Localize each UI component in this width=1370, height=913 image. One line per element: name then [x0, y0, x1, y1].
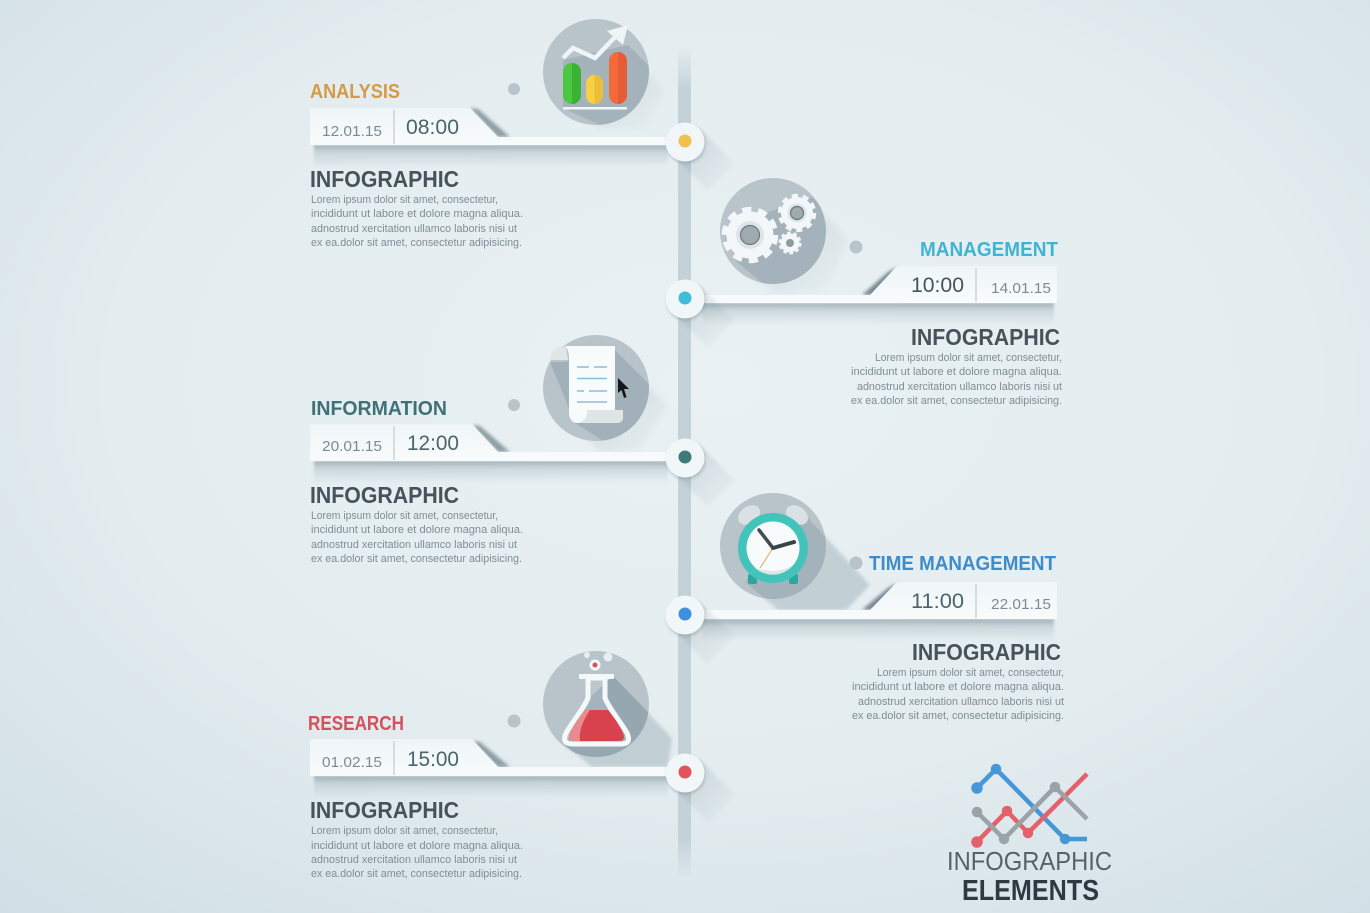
- step 3: information: [310, 335, 735, 565]
- timeline node: [666, 280, 735, 348]
- connector dot: [508, 83, 520, 95]
- description text: [310, 482, 523, 565]
- icon: line chart: [974, 766, 1087, 846]
- logo: infographic elements: [947, 766, 1112, 907]
- heading: information: INFORMATION: [311, 398, 447, 420]
- description text: [310, 166, 523, 249]
- timeline node: [666, 122, 735, 191]
- connector dot: [508, 714, 520, 728]
- date and time bar: 08:00: [406, 116, 459, 139]
- description text: INFOGRAPHIC: [911, 324, 1060, 350]
- description text: adnostrud xercitation ullamco laboris nisi ut: [311, 854, 517, 866]
- timeline node: [666, 596, 735, 664]
- logo subtitle: ELEMENTS: [962, 875, 1099, 907]
- step 5: research: [308, 651, 735, 880]
- description text: adnostrud xercitation ullamco laboris nisi ut: [857, 381, 1062, 393]
- description text: incididunt ut labore et dolore magna aliqua.: [311, 208, 523, 220]
- date and time bar: 01.02.15: [322, 754, 382, 771]
- timeline node: [666, 754, 735, 822]
- date and time bar: 12:00: [407, 432, 459, 455]
- description text: incididunt ut labore et dolore magna aliqua.: [851, 366, 1062, 378]
- heading: analysis: ANALYSIS: [310, 81, 400, 103]
- description text: ex ea.dolor sit amet, consectetur adipisicing.: [311, 237, 522, 249]
- step 4: time management: [666, 493, 1064, 722]
- description text: Lorem ipsum dolor sit amet, consectetur,: [311, 825, 498, 837]
- description text: [851, 324, 1062, 407]
- description text: [310, 797, 523, 880]
- icon: gears: [720, 178, 842, 291]
- date and time bar: 15:00: [407, 748, 459, 771]
- description text: incididunt ut labore et dolore magna aliqua.: [311, 840, 523, 852]
- timeline spine: [678, 48, 691, 880]
- description text: ex ea.dolor sit amet, consectetur adipisicing.: [311, 868, 522, 880]
- timeline node: [666, 438, 735, 507]
- connector dot: [850, 556, 862, 570]
- date and time bar: 11:00: [911, 590, 964, 613]
- step 2: management: [666, 178, 1062, 407]
- date and time bar: 14.01.15: [991, 280, 1051, 297]
- description text: Lorem ipsum dolor sit amet, consectetur,: [875, 352, 1062, 364]
- date and time bar: 12.01.15: [322, 123, 382, 140]
- description text: [852, 639, 1064, 722]
- description text: INFOGRAPHIC: [310, 797, 459, 823]
- description text: ex ea.dolor sit amet, consectetur adipisicing.: [311, 553, 522, 565]
- heading: research: RESEARCH: [308, 713, 404, 735]
- description text: ex ea.dolor sit amet, consectetur adipisicing.: [852, 710, 1064, 722]
- date and time bar: [310, 424, 670, 483]
- description text: adnostrud xercitation ullamco laboris nisi ut: [858, 696, 1064, 708]
- date and time bar: 20.01.15: [322, 438, 382, 455]
- icon: document scroll with cursor: [543, 335, 670, 455]
- description text: Lorem ipsum dolor sit amet, consectetur,: [311, 194, 498, 206]
- icon: alarm clock: [720, 493, 870, 610]
- icon: bar chart with arrow: [543, 19, 656, 125]
- description text: incididunt ut labore et dolore magna aliqua.: [311, 524, 523, 536]
- connector dot: [850, 240, 862, 254]
- description text: incididunt ut labore et dolore magna aliqua.: [852, 681, 1064, 693]
- description text: Lorem ipsum dolor sit amet, consectetur,: [311, 510, 498, 522]
- description text: Lorem ipsum dolor sit amet, consectetur,: [877, 667, 1064, 679]
- description text: adnostrud xercitation ullamco laboris nisi ut: [311, 539, 517, 551]
- date and time bar: 22.01.15: [991, 596, 1051, 613]
- description text: INFOGRAPHIC: [310, 482, 459, 508]
- logo title: INFOGRAPHIC: [947, 846, 1112, 876]
- date and time bar: [310, 108, 670, 167]
- description text: adnostrud xercitation ullamco laboris nisi ut: [311, 223, 517, 235]
- step 1: analysis: [310, 19, 735, 249]
- date and time bar: [700, 266, 1057, 325]
- date and time bar: [700, 582, 1057, 641]
- date and time bar: [310, 739, 670, 798]
- icon: flask: [543, 651, 673, 767]
- heading: management: MANAGEMENT: [920, 239, 1058, 261]
- description text: INFOGRAPHIC: [912, 639, 1061, 665]
- date and time bar: 10:00: [911, 274, 964, 297]
- heading: time management: TIME MANAGEMENT: [869, 553, 1056, 575]
- description text: ex ea.dolor sit amet, consectetur adipisicing.: [851, 395, 1062, 407]
- connector dot: [508, 399, 520, 411]
- description text: INFOGRAPHIC: [310, 166, 459, 192]
